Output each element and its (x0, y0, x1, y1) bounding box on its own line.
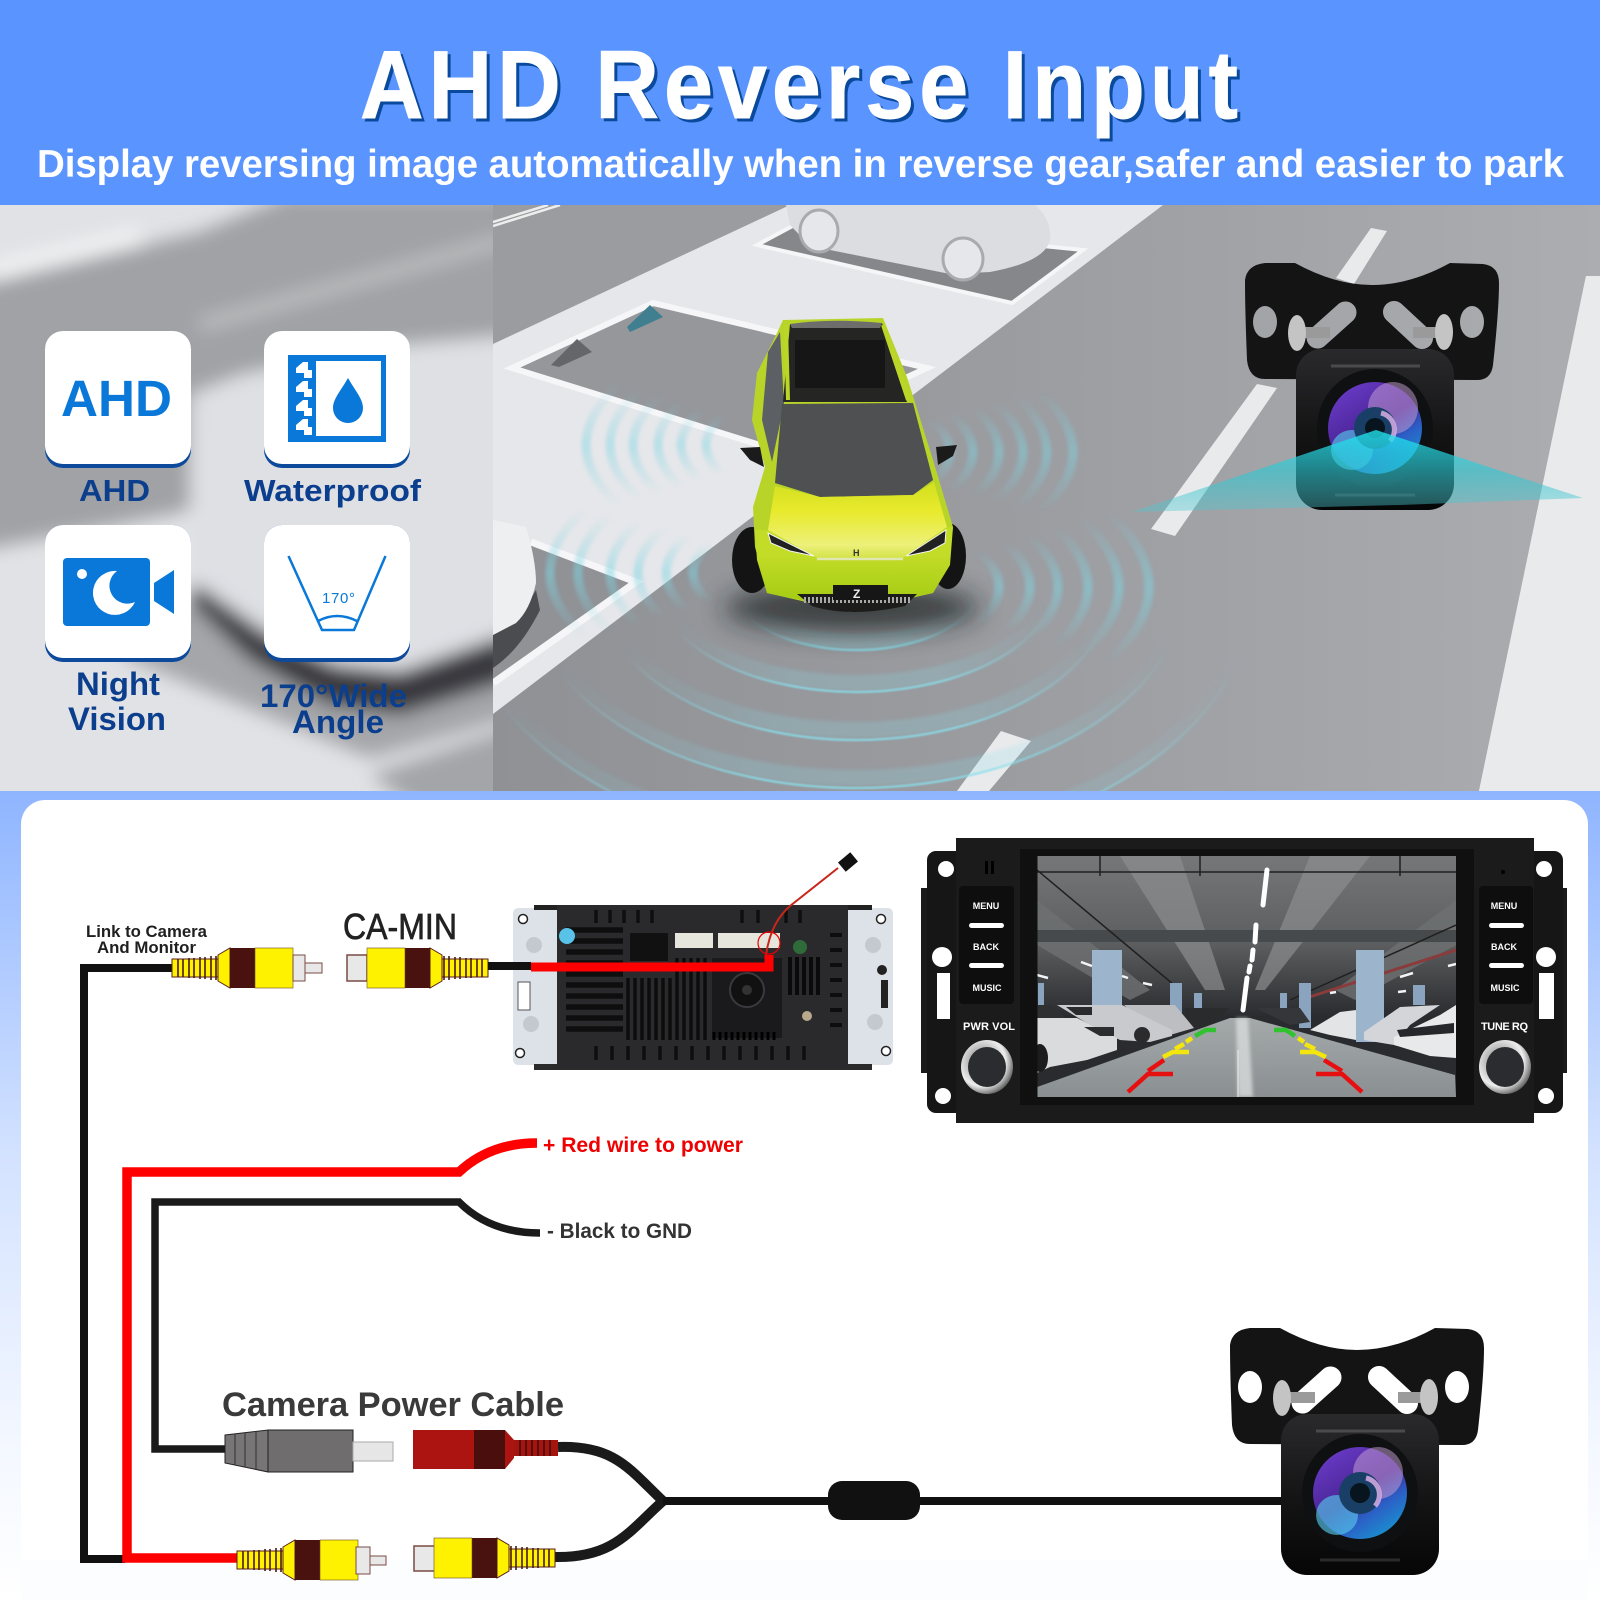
mirror right (936, 445, 957, 465)
blurred left background (0, 195, 520, 810)
rca socket bottom right (414, 1538, 555, 1578)
card AHD: AHD (61, 370, 172, 427)
sharp right scene (493, 205, 1600, 791)
floor (1037, 1018, 1456, 1097)
parking scene (0, 205, 1600, 791)
buttons right: MENU (1491, 901, 1517, 911)
red wire label: + Red wire to power (543, 1134, 743, 1157)
power lead (766, 868, 838, 955)
title: AHD Reverse Input (363, 33, 1241, 142)
label link to camera: And Monitor (97, 938, 196, 957)
wheel stopper grey (551, 339, 592, 367)
knob left (961, 1040, 1013, 1094)
label link to camera (86, 922, 208, 957)
label link to camera: Link to Camera (86, 922, 208, 941)
wiring panel (21, 800, 1588, 1600)
monitor (921, 838, 1567, 1123)
white car nose (493, 535, 540, 668)
knob right (1479, 1040, 1531, 1094)
buttons left (959, 861, 1015, 1033)
parking bay with stoppers (512, 303, 927, 445)
green car (724, 318, 980, 632)
buttons right: TUNE RQ (1481, 1021, 1528, 1033)
rca socket CA-MIN (347, 948, 488, 988)
parked cars right (1256, 1005, 1456, 1058)
ceiling lights (1243, 870, 1267, 1010)
card AHD (45, 331, 191, 468)
reversing screen (1032, 856, 1457, 1097)
card night vision (45, 525, 191, 662)
upper parked car (786, 205, 1050, 280)
grey plug (225, 1430, 393, 1472)
guide lines (1128, 1030, 1362, 1092)
label AHD: AHD (79, 473, 150, 508)
label night vision (68, 666, 166, 737)
label night vision: Night (76, 666, 160, 702)
sensor ripples rear (580, 394, 1078, 496)
pillars (1092, 950, 1122, 1005)
green car: H (853, 548, 860, 558)
camera power cable label: Camera Power Cable (222, 1386, 564, 1424)
black wire label: - Black to GND (547, 1220, 692, 1243)
buttons left: PWR VOL (963, 1021, 1015, 1033)
page background gradient (0, 791, 1600, 1600)
label night vision: Vision (68, 701, 166, 737)
mirror left (740, 447, 764, 467)
camera bottom (1230, 1328, 1484, 1575)
label CA-MIN: CA-MIN (343, 906, 457, 947)
main tarmac (493, 205, 1600, 791)
road dashes (957, 228, 1600, 791)
title: AHD Reverse Input (360, 30, 1238, 139)
card waterproof (264, 331, 410, 468)
upper parked car bay (757, 222, 1083, 303)
sensor ripples front sides (544, 518, 1154, 642)
rca plug bottom left (237, 1540, 386, 1580)
camera top with beam (1132, 263, 1583, 512)
header banner (0, 0, 1600, 205)
wires (84, 968, 1282, 1559)
lower left parking bay (493, 535, 630, 680)
buttons right: BACK (1491, 942, 1517, 952)
buttons right (1479, 870, 1533, 1033)
buttons left: MENU (973, 901, 999, 911)
buttons left: BACK (973, 942, 999, 952)
subtitle: Display reversing image automatically when in reverse gear,safer and easier to park (37, 143, 1565, 186)
upper road (493, 205, 790, 344)
parked cars left (1038, 1005, 1206, 1073)
label wide angle: 170°Wide (260, 678, 407, 714)
head unit rear (488, 852, 893, 1070)
wheel stopper teal (627, 305, 663, 332)
buttons right: MUSIC (1490, 983, 1520, 993)
green car: Z (853, 587, 860, 601)
label wide angle (260, 678, 407, 740)
card wide angle: 170° (322, 590, 355, 607)
teal field of view beam (1132, 430, 1583, 512)
ferrite bead (828, 1481, 920, 1520)
feature icons (45, 331, 422, 740)
cable black then red (488, 962, 531, 970)
card wide angle (264, 525, 410, 662)
label wide angle: Angle (292, 704, 384, 740)
label waterproof: Waterproof (244, 473, 422, 508)
sensor ripples front arcs (522, 617, 1209, 791)
buttons left: MUSIC (972, 983, 1002, 993)
red plug (413, 1430, 558, 1469)
ceiling beams (1120, 856, 1225, 990)
rca plug top left (172, 948, 322, 988)
